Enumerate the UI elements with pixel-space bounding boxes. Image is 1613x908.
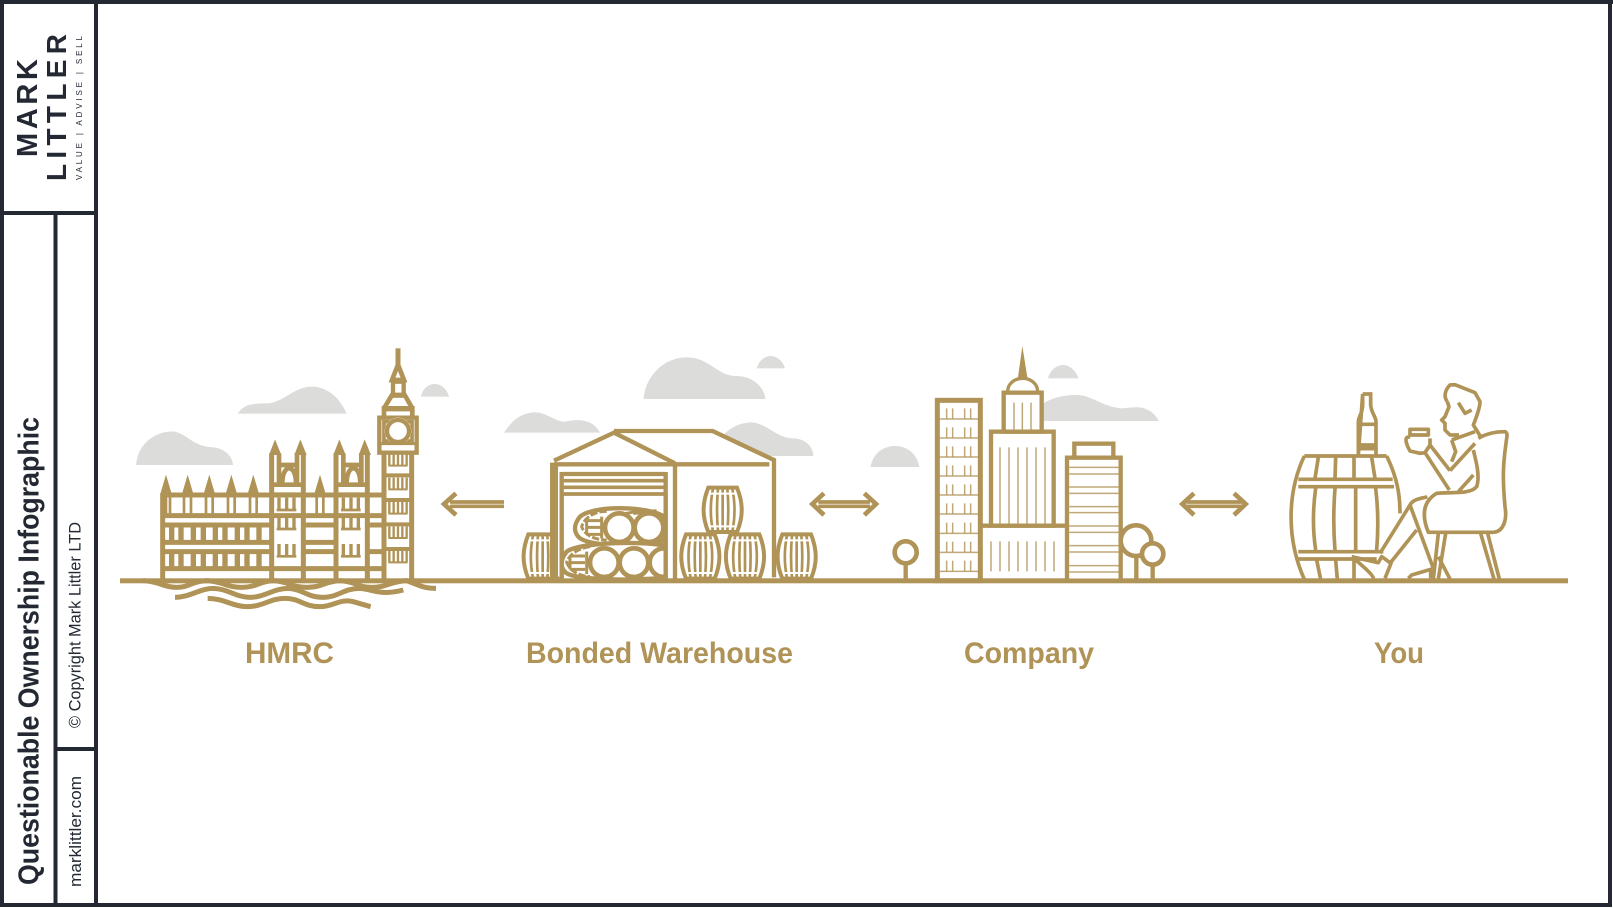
title: Questionable Ownership Infographic: [14, 417, 46, 885]
illustration: you with barrel and whisky: [1182, 394, 1400, 579]
arrow: warehouse and company: [812, 493, 876, 515]
warehouse building: [554, 431, 774, 579]
logo: Mark Littler: [12, 34, 84, 181]
logo: Mark Littler: MARK: [12, 59, 44, 157]
logo: Mark Littler: VALUE | ADVISE | SELL: [75, 35, 84, 180]
cloud: [238, 387, 347, 414]
label: Bonded Warehouse: Bonded Warehouse: [526, 637, 793, 670]
man seated in armchair: [1352, 385, 1507, 579]
cloud: [644, 357, 765, 399]
cloud: [504, 412, 600, 433]
Big Ben tower: [379, 348, 417, 562]
barrel: [1291, 456, 1400, 579]
hand and cup: [1406, 429, 1450, 490]
label: Company: Company: [964, 637, 1095, 670]
logo: Mark Littler: LITTLER: [41, 34, 72, 181]
shoes: [1352, 557, 1431, 578]
head and hair: [1442, 385, 1482, 438]
door frame: [562, 494, 666, 579]
legs of man: [1380, 497, 1433, 568]
illustration: bonded warehouse with arrows: [444, 356, 876, 579]
cloud: [136, 431, 233, 465]
website: marklittler.com: [66, 776, 85, 887]
cloud: [871, 446, 919, 467]
label: You: You: [1374, 637, 1424, 670]
river waves: [143, 581, 436, 588]
stacked horizontal barrels: [564, 506, 664, 578]
arrow: warehouse to HMRC: [444, 493, 504, 515]
cloud: [1043, 395, 1159, 421]
barrel: [726, 534, 764, 579]
collar and jacket: [1450, 432, 1475, 492]
parliament building: [160, 439, 412, 579]
illustration: company skyline: [871, 346, 1163, 581]
trees: [1121, 525, 1163, 580]
bottle: [1358, 394, 1376, 455]
copyright note: © Copyright Mark Littler LTD: [66, 522, 84, 728]
barrel top: [704, 488, 742, 532]
barrel: [681, 534, 719, 579]
tree: [895, 541, 917, 580]
label: HMRC: HMRC: [245, 637, 334, 670]
barrel left: [524, 534, 562, 579]
right tower: [1067, 444, 1121, 581]
central skyscraper: [982, 346, 1067, 571]
cloud: [1048, 365, 1078, 378]
cloud: [421, 384, 449, 397]
arrow: company and you: [1182, 493, 1246, 515]
armchair: [1424, 432, 1507, 532]
chair legs: [1433, 533, 1499, 579]
barrel right: [778, 534, 816, 579]
cloud: [757, 356, 785, 368]
left tower: [937, 400, 980, 581]
ground line: [120, 578, 1568, 583]
illustration: HMRC Parliament and Big Ben: [136, 348, 449, 607]
cloud: [720, 422, 813, 456]
